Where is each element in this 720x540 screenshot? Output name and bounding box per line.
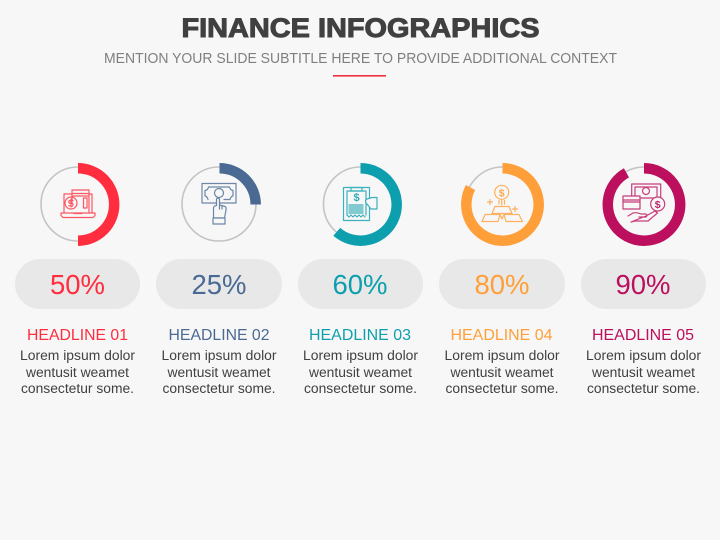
donut 2 (182, 167, 256, 241)
body text 1: consectetur some. (21, 380, 134, 396)
body text 3: wentusit weamet (308, 364, 412, 380)
subtitle: MENTION YOUR SLIDE SUBTITLE HERE TO PROVIDE ADDITIONAL CONTEXT (104, 51, 617, 67)
donut 1 (41, 167, 115, 241)
icon: laptop with coin (61, 190, 95, 218)
icon: banknote and hand (202, 184, 236, 224)
headline 2: HEADLINE 02 (168, 327, 270, 344)
body text 5 (586, 347, 701, 396)
icon: gold bars and coin (482, 185, 522, 222)
column 3: 60% (298, 167, 423, 396)
body text 3 (303, 347, 418, 396)
icon: dollar sign on clipboard: $ (353, 192, 360, 204)
body text 2: consectetur some. (162, 380, 276, 396)
headline 5: HEADLINE 05 (592, 327, 694, 344)
icon: dollar sign on coin: $ (499, 187, 505, 199)
percent 1: 50% (50, 269, 105, 300)
percent 3: 60% (332, 269, 388, 300)
percent pill 5 (581, 259, 706, 309)
body text 2: Lorem ipsum dolor (162, 347, 277, 363)
column 1: 50% (15, 167, 140, 396)
body text 5: wentusit weamet (591, 364, 695, 380)
body text 4: wentusit weamet (450, 364, 554, 380)
body text 3: consectetur some. (304, 380, 417, 396)
title underline (333, 75, 386, 77)
body text 4 (444, 347, 560, 396)
body text 5: consectetur some. (587, 380, 700, 396)
percent pill 3 (298, 259, 423, 309)
headline 1: HEADLINE 01 (27, 327, 128, 344)
percent 5: 90% (615, 269, 671, 300)
donut 5 (607, 167, 681, 241)
donut 4 (466, 167, 540, 241)
icon: cash, card and hand (623, 184, 665, 222)
icon: clipboard receipt (344, 188, 377, 220)
body text 2: wentusit weamet (167, 364, 271, 380)
body text 1: Lorem ipsum dolor (20, 347, 135, 363)
body text 3: Lorem ipsum dolor (303, 347, 418, 363)
body text 5: Lorem ipsum dolor (586, 347, 701, 363)
column 4: 80% (439, 167, 565, 396)
percent 4: 80% (474, 269, 530, 300)
percent pill 4 (439, 259, 565, 309)
headline 3: HEADLINE 03 (309, 327, 411, 344)
title: FINANCE INFOGRAPHICS (182, 13, 540, 43)
body text 4: Lorem ipsum dolor (444, 347, 560, 363)
body text 4: consectetur some. (446, 380, 558, 396)
body text 1: wentusit weamet (25, 364, 129, 380)
percent pill 1 (15, 259, 140, 309)
icon: dollar sign on coin: $ (655, 199, 661, 211)
column 2: 25% (156, 167, 282, 396)
donut 3 (324, 167, 398, 241)
headline 4: HEADLINE 04 (450, 327, 553, 344)
percent pill 2 (156, 259, 282, 309)
body text 2 (162, 347, 277, 396)
body text 1 (20, 347, 135, 396)
column 5: 90% (581, 167, 706, 396)
percent 2: 25% (191, 269, 247, 300)
